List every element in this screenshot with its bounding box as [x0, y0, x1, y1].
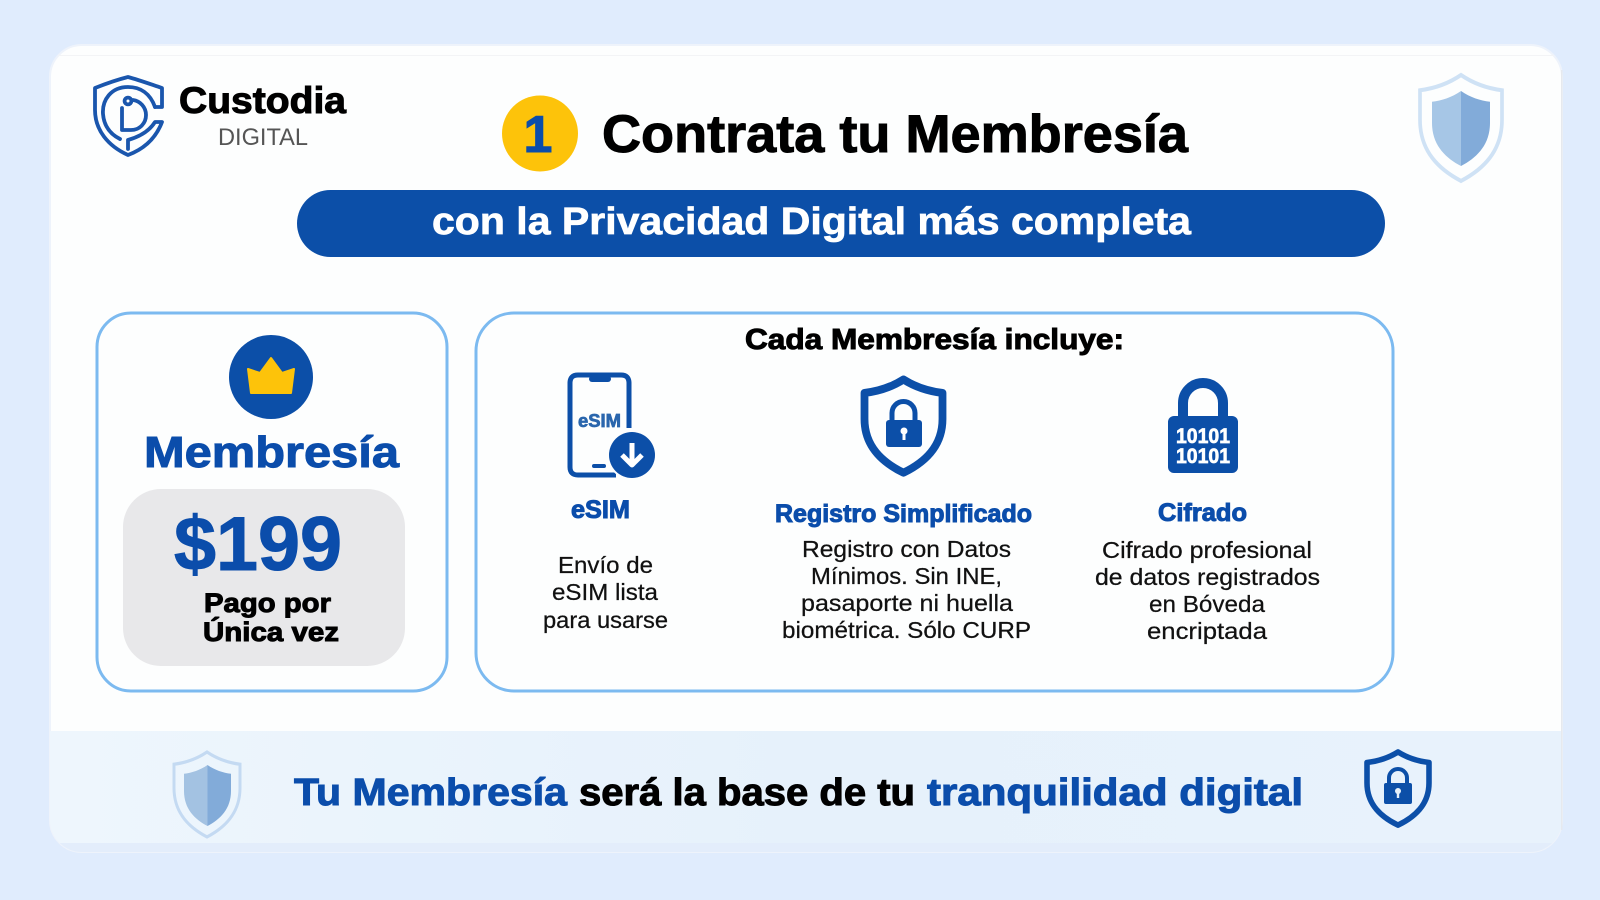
feature description [543, 552, 668, 633]
logo subtitle: DIGITAL [218, 124, 308, 151]
panel heading: Cada Membresía incluye: [745, 324, 1124, 356]
icon: footer shield with lock [1367, 752, 1429, 825]
icon: binary padlock: 10101 [1176, 425, 1230, 448]
icon: eSIM phone download [570, 375, 657, 480]
logo wordmark: Custodia [179, 80, 346, 121]
feature description: Cifrado profesional [1102, 537, 1312, 563]
icon: shield with lock [864, 380, 942, 473]
feature description [782, 536, 1031, 643]
icon: logo shield [95, 77, 162, 155]
payment note: Pago por [204, 588, 332, 618]
feature title: Registro Simplificado [775, 500, 1032, 528]
feature description: para usarse [543, 607, 668, 633]
icon: eSIM phone download: eSIM [578, 411, 621, 431]
subtitle banner: con la Privacidad Digital más completa [432, 201, 1192, 243]
feature description: Envío de [558, 552, 653, 578]
feature description: encriptada [1147, 618, 1267, 644]
icon: decorative shield bottom left [174, 752, 240, 837]
heading: step number and title [502, 96, 1189, 172]
icon: crown badge [229, 335, 313, 419]
footer tagline: tranquilidad digital [927, 772, 1303, 814]
payment note [203, 588, 339, 647]
membership heading: Membresía [144, 428, 400, 477]
feature: encryption [1095, 383, 1320, 644]
feature: simplified registration [775, 380, 1032, 643]
panel: membership includes [476, 313, 1393, 691]
payment note: Única vez [203, 616, 339, 647]
feature title: eSIM [571, 496, 630, 524]
icon: binary padlock [1168, 383, 1238, 473]
feature title: Cifrado [1158, 499, 1247, 527]
icon: decorative shield top right [1420, 75, 1502, 181]
step number badge [502, 96, 578, 172]
icon: binary padlock: 10101 [1176, 445, 1230, 468]
logo: Custodia Digital [95, 77, 346, 155]
feature: eSIM [543, 375, 668, 633]
panel: membership price [97, 313, 447, 691]
feature description: eSIM lista [552, 579, 658, 605]
price: $199 [174, 502, 342, 587]
feature description: biométrica. Sólo CURP [782, 617, 1031, 643]
step number badge: 1 [524, 106, 552, 164]
feature description: en Bóveda [1149, 591, 1265, 617]
feature description: Registro con Datos [802, 536, 1011, 562]
title: Contrata tu Membresía [602, 105, 1189, 164]
feature description: Mínimos. Sin INE, [811, 563, 1002, 589]
footer tagline: Tu Membresía [294, 772, 568, 814]
feature description: de datos registrados [1095, 564, 1320, 590]
price box [123, 489, 405, 666]
feature description: pasaporte ni huella [801, 590, 1013, 616]
footer tagline [294, 772, 1303, 814]
subtitle banner [297, 190, 1385, 257]
footer tagline: será la base de tu [579, 772, 915, 814]
feature description [1095, 537, 1320, 644]
